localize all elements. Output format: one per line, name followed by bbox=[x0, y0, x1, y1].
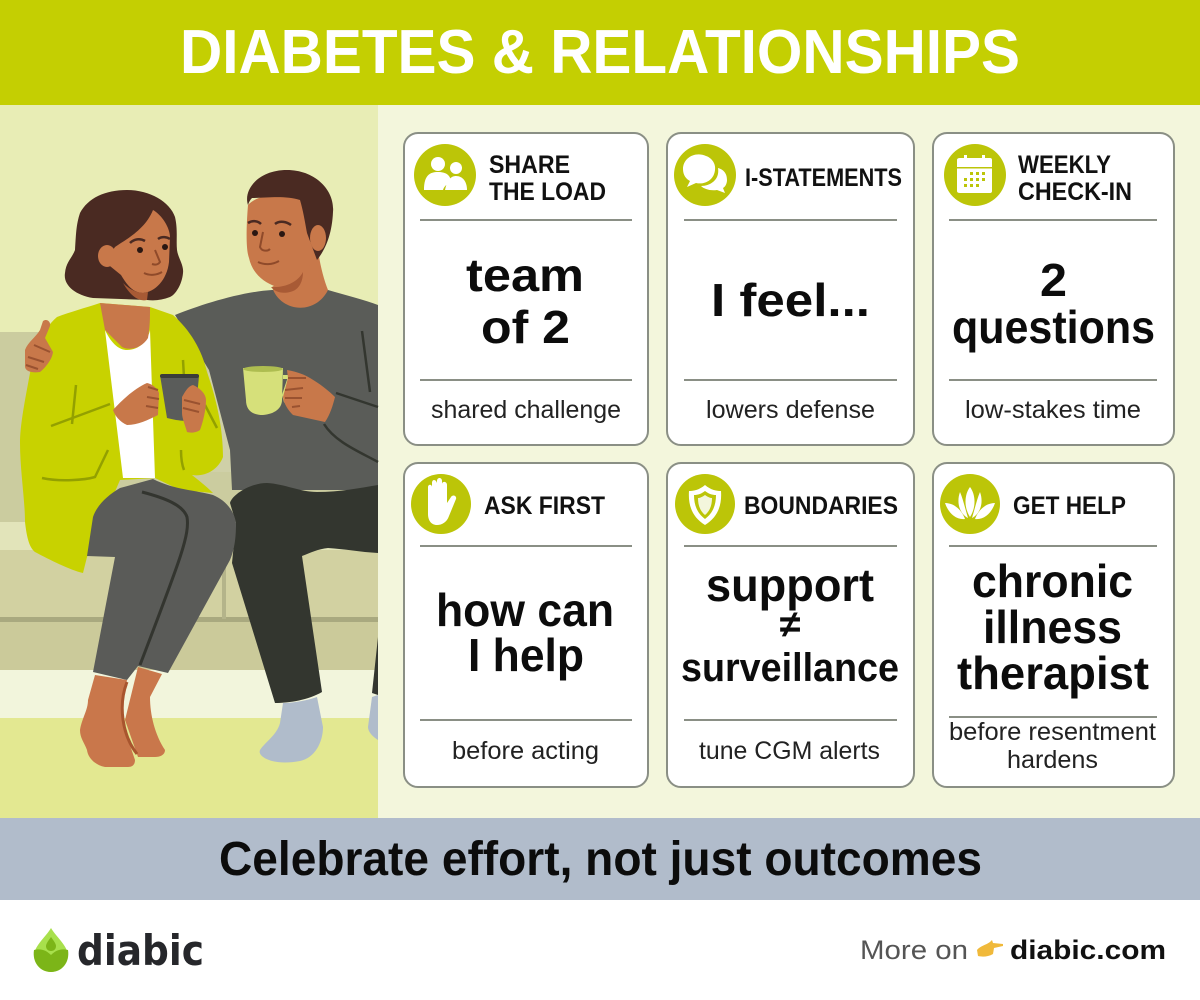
man bbox=[175, 170, 378, 762]
caption: before acting bbox=[452, 737, 599, 765]
caption: shared challenge bbox=[431, 396, 621, 424]
bottom banner bbox=[0, 818, 1200, 900]
card: share the load: of 2 bbox=[481, 301, 570, 353]
icon: shield bbox=[675, 474, 735, 534]
card: boundaries: surveillance bbox=[681, 646, 899, 690]
right panel background bbox=[378, 105, 1200, 818]
card: get help: therapist bbox=[957, 647, 1149, 699]
heading: I-STATEMENTS bbox=[745, 164, 902, 192]
card: get help bbox=[933, 463, 1174, 787]
man's mug and hand bbox=[243, 366, 335, 422]
woman bbox=[20, 190, 236, 767]
caption: before resentment bbox=[949, 718, 1156, 746]
big text: how can bbox=[436, 584, 614, 636]
big text: 2 bbox=[1040, 254, 1067, 306]
card: weekly check-in: questions bbox=[952, 301, 1155, 353]
heading: SHARE bbox=[489, 151, 570, 179]
footer link bbox=[860, 935, 1166, 965]
icon: speech bubbles bbox=[674, 144, 736, 206]
caption: low-stakes time bbox=[965, 396, 1141, 424]
icon: calendar bbox=[944, 144, 1006, 206]
heading: BOUNDARIES bbox=[744, 492, 898, 520]
card: get help: illness bbox=[983, 601, 1122, 653]
sofa bbox=[0, 332, 378, 818]
big text: I feel... bbox=[711, 274, 870, 326]
footer link: More on bbox=[860, 935, 968, 965]
card: ask first bbox=[404, 463, 648, 787]
card: weekly check-in: CHECK-IN bbox=[1018, 178, 1132, 206]
card: i-statements bbox=[667, 133, 914, 445]
footer link: diabic.com bbox=[1010, 935, 1166, 965]
heading: GET HELP bbox=[1013, 492, 1126, 520]
card: weekly check-in bbox=[933, 133, 1174, 445]
footer logo bbox=[34, 926, 204, 975]
card: get help: hardens bbox=[1007, 746, 1098, 774]
title: DIABETES & RELATIONSHIPS bbox=[180, 18, 1020, 87]
footer logo: diabic bbox=[77, 926, 204, 975]
card: boundaries: ≠ bbox=[780, 604, 801, 646]
big text: support bbox=[706, 559, 874, 611]
banner text: Celebrate effort, not just outcomes bbox=[219, 833, 982, 886]
icon: raised hand bbox=[411, 474, 471, 534]
heading: ASK FIRST bbox=[484, 492, 605, 520]
big text: chronic bbox=[972, 555, 1133, 607]
icon: pointing hand bbox=[977, 940, 1003, 957]
heading: WEEKLY bbox=[1018, 151, 1111, 179]
icon: two people bbox=[414, 144, 476, 206]
card: ask first: I help bbox=[468, 629, 584, 681]
illustration panel: couple on sofa bbox=[0, 105, 378, 818]
card: share the load: THE LOAD bbox=[489, 178, 606, 206]
card: share the load bbox=[404, 133, 648, 445]
big text: team bbox=[466, 249, 584, 301]
icon: lotus bbox=[940, 474, 1000, 534]
woman's mug and hands bbox=[113, 374, 206, 433]
icon: droplet bbox=[34, 928, 68, 972]
header band bbox=[0, 0, 1200, 105]
caption: lowers defense bbox=[706, 396, 875, 424]
caption: tune CGM alerts bbox=[699, 737, 880, 765]
card: boundaries bbox=[667, 463, 914, 787]
